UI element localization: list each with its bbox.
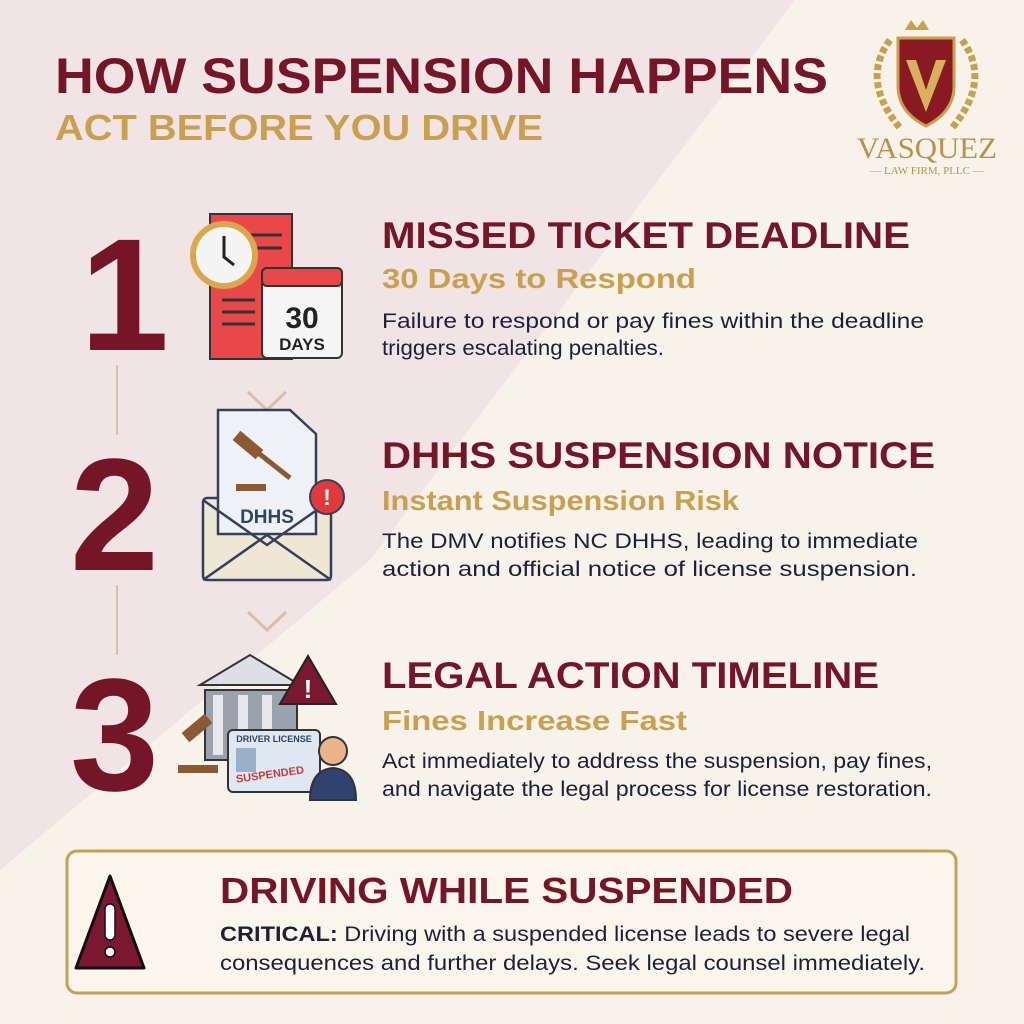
number 3: 3 (70, 645, 159, 824)
icon: courthouse license: SUSPENDED (235, 764, 305, 786)
arrow: chevron 2 (248, 612, 286, 630)
step 2 text: action and official notice of license suspension. (382, 558, 917, 581)
subtitle: ACT BEFORE YOU DRIVE (55, 107, 543, 148)
step 2 text: DHHS SUSPENSION NOTICE (382, 435, 935, 476)
step 3 text: Act immediately to address the suspension, pay fines, (382, 750, 932, 773)
icon: ticket clock calendar: DAYS (279, 335, 325, 354)
icon: courthouse license: ! (304, 674, 312, 704)
icon: DHHS envelope (203, 410, 344, 580)
icon: DHHS envelope: ! (323, 485, 331, 510)
callout: driving while suspended: consequences and further delays. Seek legal counsel immediately. (220, 952, 925, 975)
step 1 text (382, 215, 924, 360)
icon: warning triangle (76, 876, 144, 968)
arrow: chevron 1 (248, 392, 286, 410)
callout: driving while suspended (67, 851, 956, 993)
title: HOW SUSPENSION HAPPENS (55, 48, 828, 104)
icon: courthouse license: DRIVER LICENSE (236, 734, 312, 744)
step 3 text: and navigate the legal process for license restoration. (382, 778, 932, 801)
callout: driving while suspended: DRIVING WHILE SUSPENDED (220, 870, 793, 911)
step 1 text: MISSED TICKET DEADLINE (382, 215, 910, 256)
step 3 text: Fines Increase Fast (382, 705, 687, 736)
icon: ticket clock calendar (193, 214, 342, 359)
step 2 text (382, 435, 935, 581)
step 2 text: The DMV notifies NC DHHS, leading to immediate (382, 530, 918, 553)
logo: VASQUEZ (857, 132, 997, 165)
icon: DHHS envelope: DHHS (240, 507, 294, 528)
step 3 text (382, 655, 932, 801)
title (55, 48, 828, 148)
icon: ticket clock calendar: 30 (285, 302, 319, 335)
logo: — LAW FIRM, PLLC — (869, 165, 985, 177)
icon: courthouse license (178, 655, 356, 800)
step 1 text: 30 Days to Respond (382, 263, 696, 294)
number 1: 1 (80, 205, 169, 384)
number 2: 2 (70, 425, 159, 604)
step 2 text: Instant Suspension Risk (382, 485, 739, 516)
step 1 text: Failure to respond or pay fines within the deadline (382, 310, 924, 333)
logo (857, 20, 997, 177)
callout: driving while suspended: CRITICAL: Driving with a suspended license leads to severe legal (220, 923, 910, 946)
step 1 text: triggers escalating penalties. (382, 337, 664, 360)
step 3 text: LEGAL ACTION TIMELINE (382, 655, 879, 696)
